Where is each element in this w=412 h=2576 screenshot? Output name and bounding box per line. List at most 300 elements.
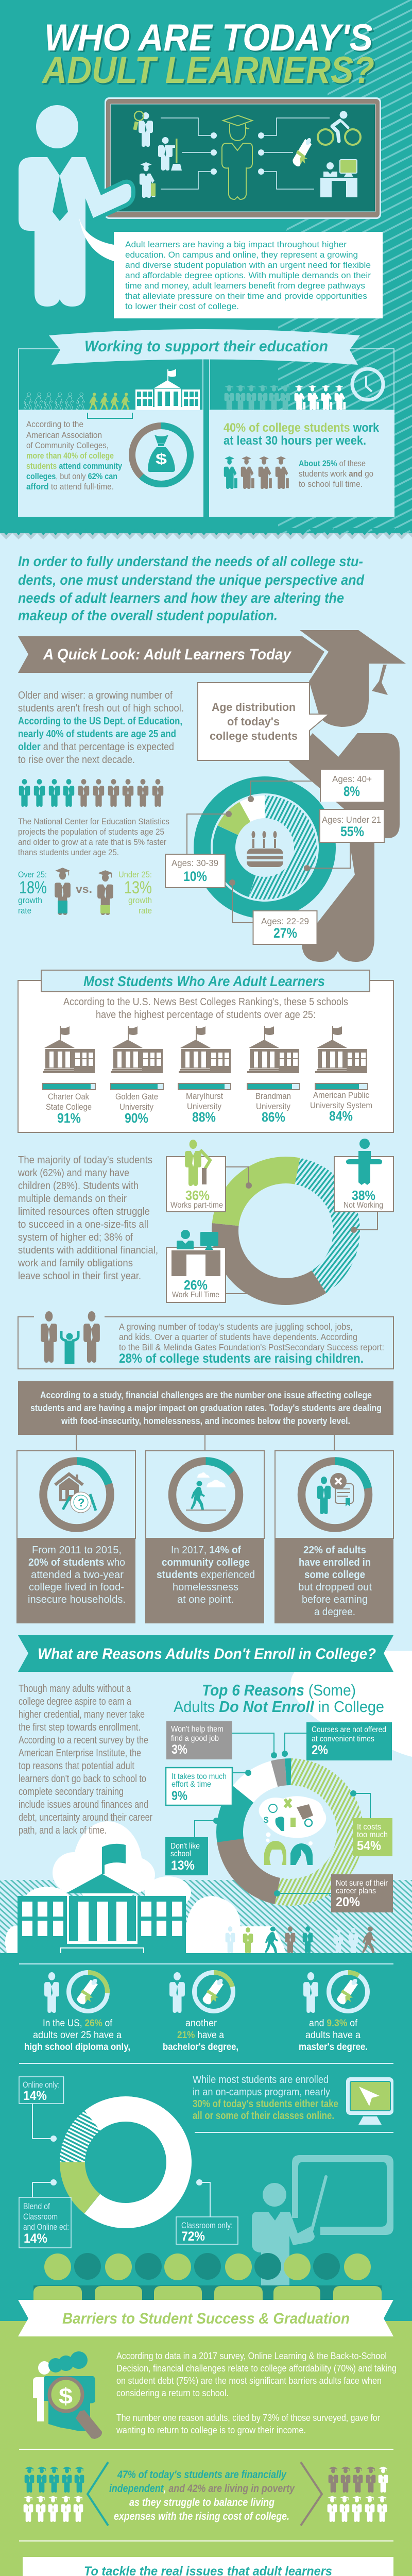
- text: majority of students work: leave school in their first year.: [18, 1270, 141, 1282]
- school: American Public: American Public: [313, 1090, 369, 1100]
- text: 40 percent: at least 30 hours per week.: [224, 434, 366, 448]
- text: reasons paragraph: Though many adults without a: [19, 1683, 131, 1694]
- text: community colleges: American Association: [26, 430, 102, 440]
- text: majority of students work: [18, 1155, 158, 1282]
- label: blend: Blend of: [23, 2202, 50, 2211]
- text: online enrolment: all or some of their classes online.: [193, 2110, 334, 2122]
- panel: education policies: [23, 2557, 393, 2576]
- four graduates: [224, 456, 289, 489]
- label: ages 30-39: [165, 854, 225, 888]
- subheading: [63, 996, 348, 1021]
- stat: bachelor's degree: [163, 1972, 238, 2053]
- stat: high school diploma: [24, 1972, 130, 2053]
- label: won't help: Won't help them: [171, 1725, 224, 1734]
- banner: financial challenges: with food-insecurity, homelessness, and incomes below the poverty level.: [61, 1416, 350, 1426]
- label: courses: Courses are not offered: [312, 1725, 386, 1734]
- speech box: age distribution: Age distribution: [212, 701, 296, 714]
- text: community colleges: students attend community: [26, 461, 122, 471]
- panel: working students: [209, 349, 394, 517]
- icon: birthday cake: [246, 831, 284, 867]
- school: Brandman: University: [256, 1101, 290, 1111]
- growth rate comparison: 18%: [19, 878, 47, 897]
- growth rate comparison: growth: [128, 895, 152, 905]
- text: reasons paragraph: American Enterprise Institute, the: [19, 1748, 141, 1759]
- box: not working: 38%: [352, 1188, 375, 1203]
- box: work full time: [166, 1230, 226, 1302]
- icon: teacher at whiteboard: [252, 2155, 393, 2285]
- card: dropped out: [274, 1451, 393, 1623]
- label: career plans: 20%: [336, 1895, 360, 1909]
- box: work full time: 26%: [184, 1277, 208, 1293]
- growth rate comparison: Under 25:: [118, 870, 152, 879]
- panel: students raising children: [18, 1311, 393, 1369]
- label: career plans: [331, 1874, 393, 1912]
- text: majority of students work: to succeed in a one-size-fits all: [18, 1219, 148, 1230]
- school: Charter Oak: [43, 1026, 95, 1126]
- school: Marylhurst: Marylhurst: [186, 1091, 223, 1101]
- banner: reasons adults do not enroll: [18, 1635, 393, 1672]
- subheading: According to the U.S. News Best Colleges Ranking's, these 5 schools: [63, 996, 348, 1008]
- text: homeless: homelessness: [173, 1582, 238, 1593]
- text: barriers survey: wanting to return to college is to grow their income.: [116, 2425, 306, 2435]
- growth rate comparison: rate: [18, 906, 31, 916]
- text: community colleges: of Community Colleges,: [26, 440, 109, 450]
- label: won't help: [166, 1721, 232, 1759]
- label: ages under 21: 55%: [340, 824, 364, 839]
- left chevron: [88, 2462, 108, 2526]
- label: blend: 14%: [24, 2231, 47, 2246]
- school: Brandman: 86%: [262, 1109, 285, 1125]
- text: 25 percent: to school full time.: [299, 480, 363, 489]
- lead paragraph: [18, 553, 365, 623]
- text: NCES projection: and older to grow at a rate that is 5% faster: [18, 838, 166, 847]
- chalkboard illustration: [105, 97, 381, 219]
- speech box: age distribution: of today's: [227, 715, 280, 728]
- banner: reasons adults do not enroll: What are Reasons Adults Don't Enroll in College?: [38, 1646, 376, 1663]
- label: classroom only: Classroom only:: [181, 2221, 233, 2230]
- label: career plans: Not sure of their: [336, 1879, 388, 1888]
- text: older and wiser: nearly 40% of students are age 25 and: [18, 728, 176, 740]
- box: works part-time: Works part-time: [170, 1201, 223, 1210]
- text: reasons paragraph: include issues around finances and: [19, 1799, 148, 1810]
- intro text block: [114, 232, 383, 318]
- label: ages 22-29: 27%: [273, 925, 297, 941]
- stat: high school diploma: In the US, 26% of: [43, 2018, 113, 2029]
- box: not working: [334, 1139, 393, 1212]
- audience: [33, 2253, 382, 2300]
- intro text block: to lower their cost of college.: [125, 301, 239, 311]
- icon: cyclist: [318, 111, 360, 145]
- white cloud behind top six heading: [290, 1651, 412, 1757]
- text: juggling: and kids. Over a quarter of students have dependents. According: [119, 1332, 357, 1342]
- stat: high school diploma: high school diploma only,: [24, 2042, 130, 2053]
- text: homeless: [157, 1545, 255, 1605]
- banner: quick look: A Quick Look: Adult Learners Today: [43, 646, 291, 663]
- label: classroom only: 72%: [181, 2229, 205, 2244]
- background: green barriers section: [0, 2321, 412, 2576]
- label: effort and time: [166, 1768, 232, 1805]
- school: American Public: 84%: [329, 1108, 353, 1124]
- icon: graduate outline: [222, 115, 252, 199]
- icon: family: [41, 1311, 100, 1363]
- label: ages 40+: 8%: [344, 784, 360, 799]
- school: Marylhurst: [178, 1026, 231, 1125]
- intro text block: and affordable degree options. With multiple demands on their: [125, 270, 371, 280]
- school: Marylhurst: University: [187, 1101, 221, 1111]
- label: effort and time: 9%: [171, 1789, 187, 1803]
- text: food insecure: insecure households.: [28, 1594, 126, 1605]
- text: financially independent: expenses with the rising cost of college.: [114, 2511, 289, 2522]
- callout lines and dots: [32, 2104, 210, 2217]
- lead paragraph: needs of adult learners and how they are altering the: [18, 590, 344, 606]
- label: courses: 2%: [312, 1743, 328, 1757]
- right chevron: [301, 2462, 322, 2526]
- icon: walking person with clouds: [186, 1472, 226, 1511]
- text: older and wiser: According to the US Dept. of Education,: [18, 716, 182, 727]
- stat: master's degree: master's degree.: [299, 2042, 368, 2053]
- row of people: [226, 1926, 375, 1953]
- text: majority of students work: system of higher ed; 38% of: [18, 1232, 133, 1243]
- text: reasons paragraph: According to a recent survey by the: [19, 1735, 148, 1746]
- label: don't like school: school: [170, 1850, 191, 1858]
- title: ADULT LEARNERS?: [41, 49, 374, 91]
- donut: 20 percent: [43, 1461, 110, 1528]
- text: barriers survey: considering a return to school.: [116, 2387, 229, 2398]
- text: community colleges: According to the: [26, 419, 83, 429]
- text: 40 percent: [224, 421, 380, 448]
- label: courses: at convenient times: [312, 1735, 374, 1743]
- text: homeless: at one point.: [177, 1594, 234, 1605]
- text: reasons paragraph: top reasons that potential adult: [19, 1760, 134, 1772]
- label: online only: 14%: [23, 2089, 47, 2103]
- text: homeless: students experienced: [157, 1569, 255, 1581]
- panel: most students who are adult learners: [18, 970, 393, 1132]
- ribbon heading: working: [49, 329, 360, 365]
- pictogram: ten people: [19, 779, 163, 807]
- lead paragraph: dents, one must understand the unique perspective and: [18, 572, 365, 588]
- text: juggling: [119, 1321, 384, 1366]
- text: food insecure: college lived in food-: [29, 1582, 124, 1593]
- connector lines: [161, 118, 330, 189]
- intro text block: education. On campus and online, they represent a growing: [125, 250, 358, 260]
- label: blend: Classroom: [23, 2212, 58, 2222]
- connector dots: [211, 132, 264, 175]
- stat: bachelor's degree: another: [185, 2018, 217, 2029]
- growth rate comparison: growth: [18, 895, 42, 905]
- card: homelessness: [145, 1451, 264, 1623]
- text: majority of students work: students with additional financial,: [18, 1245, 158, 1256]
- speech pointer: [79, 217, 114, 261]
- text: older and wiser: students aren't fresh out of high school.: [18, 703, 184, 714]
- subheading: have the highest percentage of students over age 25:: [96, 1009, 316, 1021]
- text: NCES projection: projects the population of students age 25: [18, 827, 164, 837]
- label: won't help: 3%: [171, 1742, 187, 1757]
- text: financially independent: [109, 2469, 295, 2522]
- label: costs too much: too much: [357, 1831, 388, 1839]
- text: 40 percent: 40% of college students work: [224, 421, 380, 435]
- growth rate comparison: [18, 868, 152, 916]
- intro text block: time and money, adult learners benefit from degree pathways: [125, 281, 365, 291]
- box: not working: Not Working: [344, 1201, 383, 1210]
- label: don't like school: [165, 1837, 208, 1875]
- clouds behind school: [5, 1821, 286, 1959]
- donut: 62 percent with money bag: [132, 426, 191, 484]
- text: online enrolment: [193, 2074, 338, 2122]
- stat: master's degree: and 9.3% of: [309, 2018, 358, 2029]
- growth rate comparison: vs.: [76, 884, 92, 895]
- card: food insecurity: [16, 1451, 135, 1623]
- icon: man with broom: [158, 137, 182, 171]
- text: older and wiser: to rise over the next decade.: [18, 754, 135, 766]
- text: homeless: In 2017, 14% of: [171, 1545, 241, 1556]
- bracket: [88, 413, 132, 418]
- donut chart: reasons: [165, 1721, 393, 1917]
- school: Brandman: Brandman: [255, 1091, 291, 1101]
- heading: top 6 reasons: Top 6 Reasons (Some): [202, 1681, 356, 1699]
- icon: person with diploma donut: [303, 1972, 368, 2013]
- text: reasons paragraph: path, and a lack of time.: [19, 1825, 107, 1836]
- heading tab: Most Students Who Are Adult Learners: [83, 973, 325, 989]
- speech box: age distribution: [198, 683, 329, 760]
- school: Golden Gate: Golden Gate: [115, 1092, 158, 1101]
- text: majority of students work: limited resources often struggle: [18, 1206, 150, 1217]
- label: don't like school: 13%: [171, 1858, 195, 1873]
- label: ages 40+: [320, 769, 384, 802]
- faded graduates: [225, 385, 290, 410]
- text: reasons paragraph: learners don't go back to school to: [19, 1773, 146, 1785]
- text: online enrolment: While most students are enrolled: [193, 2074, 329, 2086]
- school: Charter Oak: State College: [46, 1102, 92, 1112]
- text: 25 percent: students work and go: [299, 469, 373, 479]
- center icon: thought cloud with people: [259, 1796, 326, 1865]
- large graduate silhouette: [289, 630, 406, 962]
- icon: desk worker: [320, 160, 357, 197]
- growth rate comparison: Over 25:: [18, 870, 47, 879]
- school: American Public: University System: [310, 1100, 372, 1110]
- school: Marylhurst: 88%: [192, 1109, 216, 1125]
- text: community colleges: afford to attend full-time.: [26, 482, 114, 492]
- intro text block: and diverse student population with an urgent need for flexible: [125, 260, 371, 270]
- text: dropped out: 22% of adults: [303, 1545, 366, 1556]
- teacher figure: [19, 105, 131, 307]
- title: WHO ARE TODAY'S: [44, 17, 373, 59]
- label: classroom only: [176, 2217, 238, 2244]
- background: teal header: [0, 0, 412, 536]
- icon: college building: [135, 369, 200, 410]
- label: career plans: career plans: [336, 1887, 376, 1895]
- text: online enrolment: in an on-campus program, nearly: [193, 2087, 330, 2098]
- lead paragraph: In order to fully understand the needs of all college stu-: [18, 553, 363, 569]
- text: community colleges: more than 40% of college: [26, 451, 114, 461]
- banner: financial challenges: According to a study, financial challenges are the number one issue affecting college: [40, 1390, 372, 1400]
- label: ages under 21: Ages: Under 21: [322, 815, 381, 825]
- text: juggling: A growing number of today's students are juggling school, jobs,: [119, 1321, 353, 1332]
- icon: diploma: [293, 137, 312, 166]
- icon: college building: [18, 1844, 186, 1954]
- donut chart: class format: [19, 2077, 238, 2248]
- text: financially independent: as they struggle to balance living: [129, 2497, 274, 2509]
- banner: financial challenges: [18, 1381, 393, 1435]
- label: ages 30-39: 10%: [183, 869, 207, 884]
- text: majority of students work: work (62%) and many have: [18, 1167, 129, 1179]
- text: reasons paragraph: higher credential, many never take: [19, 1709, 145, 1720]
- text: older and wiser: Older and wiser: a growing number of: [18, 690, 173, 701]
- text: dropped out: a degree.: [314, 1606, 355, 1618]
- title: [41, 17, 374, 91]
- growth rate comparison: 13%: [124, 878, 152, 897]
- label: effort and time: It takes too much: [171, 1772, 227, 1781]
- callout lines: [226, 1167, 377, 1294]
- text: juggling: to the Bill & Melinda Gates Foundation's PostSecondary Success report:: [119, 1342, 384, 1352]
- white outline walkers: [24, 393, 85, 410]
- text: dropped out: before earning: [302, 1594, 368, 1605]
- label: online only: Online only:: [23, 2080, 60, 2090]
- school: Golden Gate: [111, 1026, 163, 1126]
- pictogram: living in poverty: [328, 2467, 388, 2522]
- text: majority of students work: The majority of today's students: [18, 1155, 152, 1166]
- text: NCES projection: The National Center for Education Statistics: [18, 817, 169, 826]
- school: American Public: [310, 1026, 372, 1124]
- icon: people and magnifier: [33, 2351, 102, 2439]
- donut: 62 percent with money bag: $: [156, 451, 167, 468]
- label: costs too much: 54%: [357, 1839, 381, 1853]
- text: dropped out: have enrolled in: [299, 1557, 371, 1568]
- text: majority of students work: work and family obligations: [18, 1258, 133, 1269]
- text: reasons paragraph: complete secondary training: [19, 1786, 124, 1798]
- donut chart: age distribution: [165, 769, 384, 944]
- stat: bachelor's degree: bachelor's degree,: [163, 2042, 238, 2053]
- label: ages 30-39: Ages: 30-39: [171, 858, 218, 868]
- icon: graduate over 25: [55, 868, 71, 915]
- donut: 14 percent: [172, 1461, 239, 1528]
- icon: house and plate: [55, 1474, 96, 1513]
- label: costs too much: [353, 1818, 392, 1856]
- intro text block: Adult learners are having a big impact throughout higher: [125, 240, 347, 249]
- ribbon heading: working: Working to support their education: [84, 338, 328, 355]
- box: works part-time: 36%: [185, 1188, 210, 1203]
- text: majority of students work: multiple demands on their: [18, 1193, 127, 1205]
- label: ages 40+: Ages: 40+: [332, 774, 372, 784]
- label: ages 22-29: [253, 911, 317, 944]
- text: dropped out: some college: [304, 1569, 365, 1581]
- text: community colleges: colleges, but only 62% can: [26, 471, 117, 481]
- text: older and wiser: older and that percentage is expected: [18, 741, 174, 753]
- callout lines and dots: [187, 781, 350, 923]
- background: teal attainment section: [0, 1953, 412, 2324]
- text: food insecure: From 2011 to 2015,: [32, 1545, 122, 1556]
- text: 25 percent: About 25% of these: [299, 459, 366, 468]
- icon: house and plate: ?: [78, 1496, 84, 1509]
- label: ages under 21: [320, 809, 384, 842]
- box: work full time: Work Full Time: [172, 1291, 219, 1299]
- label: costs too much: It costs: [357, 1823, 381, 1832]
- pictogram: financially independent: [24, 2467, 84, 2522]
- text: 25 percent: [299, 459, 373, 489]
- text: reasons paragraph: [19, 1683, 152, 1836]
- text: homeless: community college: [162, 1557, 250, 1568]
- stat: master's degree: adults have a: [305, 2030, 360, 2041]
- label: effort and time: effort & time: [171, 1780, 211, 1789]
- text: reasons paragraph: the first step towards enrollment.: [19, 1722, 141, 1733]
- icon: person and crossed diploma: [317, 1473, 353, 1514]
- icon: person with diploma donut: [44, 1972, 107, 2013]
- speech box: age distribution: college students: [210, 730, 298, 742]
- banner: quick look: [18, 636, 324, 673]
- text: food insecure: 20% of students who: [28, 1557, 125, 1568]
- text: financially independent: 47% of today's students are financially: [117, 2469, 287, 2481]
- school: Charter Oak: 91%: [57, 1110, 81, 1126]
- text: reasons paragraph: college degree aspire to earn a: [19, 1696, 132, 1707]
- working graduates: [295, 385, 346, 410]
- background: light section: [0, 533, 412, 1955]
- text: financially independent: independent, and 42% are living in poverty: [109, 2483, 295, 2495]
- school: Golden Gate: University: [119, 1102, 153, 1112]
- donut: 22 percent: [302, 1461, 369, 1528]
- text: barriers survey: [116, 2350, 397, 2435]
- text: reasons paragraph: debt, uncertainty around their career: [19, 1812, 152, 1823]
- donut chart: employment: [166, 1139, 393, 1315]
- school: Brandman: [247, 1026, 300, 1125]
- hatched ground: [0, 1880, 412, 1954]
- panel: community colleges: [18, 349, 203, 517]
- stat: high school diploma: adults over 25 have a: [33, 2030, 122, 2041]
- text: majority of students work: children (28%). Students with: [18, 1180, 139, 1192]
- intro text block: that alleviate pressure on their time and provide opportunities: [125, 291, 367, 301]
- lead paragraph: makeup of the overall student population.: [18, 607, 278, 623]
- label: ages 22-29: Ages: 22-29: [261, 916, 309, 926]
- heading tab: [41, 970, 370, 992]
- callout lines and dots: [195, 1733, 370, 1896]
- school: Golden Gate: 90%: [125, 1110, 148, 1126]
- text: food insecure: [28, 1545, 126, 1605]
- text: NCES projection: thans students under age 25.: [18, 848, 119, 857]
- stat: master's degree: [299, 1972, 368, 2053]
- icon: man with briefcase: [140, 162, 156, 198]
- icon: monitor with cursor: [346, 2077, 393, 2125]
- text: online enrolment: 30% of today's students either take: [193, 2098, 338, 2110]
- label: don't like school: Don't like: [170, 1842, 200, 1851]
- growth rate comparison: rate: [139, 906, 152, 916]
- text: juggling: 28% of college students are raising children.: [119, 1351, 364, 1366]
- label: online only: [19, 2077, 64, 2104]
- icon: person with diploma donut: [169, 1972, 233, 2013]
- banner: barriers: Barriers to Student Success & Graduation: [62, 2310, 350, 2327]
- text: older and wiser: [18, 690, 184, 766]
- text: dropped out: [298, 1545, 372, 1618]
- label: won't help: find a good job: [171, 1734, 219, 1743]
- school: Charter Oak: Charter Oak: [48, 1092, 89, 1101]
- box: works part-time: [166, 1140, 226, 1212]
- label: blend: [19, 2197, 71, 2248]
- banner: barriers: [18, 2300, 393, 2336]
- label: courses: [306, 1722, 392, 1760]
- text: dropped out: but dropped out: [298, 1582, 372, 1593]
- text: food insecure: attended a two-year: [31, 1569, 124, 1581]
- text: NCES projection: [18, 817, 169, 857]
- icon: clock: [352, 369, 383, 400]
- icon: people and magnifier: $: [59, 2384, 73, 2409]
- icon: man with magnifier: [133, 111, 153, 147]
- text: community colleges: [26, 419, 122, 492]
- center icon: thought cloud with people: $: [264, 1815, 269, 1825]
- heading: top 6 reasons: Adults Do Not Enroll in College: [174, 1698, 384, 1716]
- heading: top 6 reasons: [174, 1681, 384, 1716]
- icon: graduate under 25: [97, 870, 113, 915]
- text: barriers survey: on student debt (75%) are the most significant barriers adults face when: [116, 2375, 382, 2386]
- label: blend: and Online ed:: [23, 2223, 69, 2232]
- stat: bachelor's degree: 21% have a: [177, 2030, 224, 2041]
- green walkers: [89, 393, 130, 410]
